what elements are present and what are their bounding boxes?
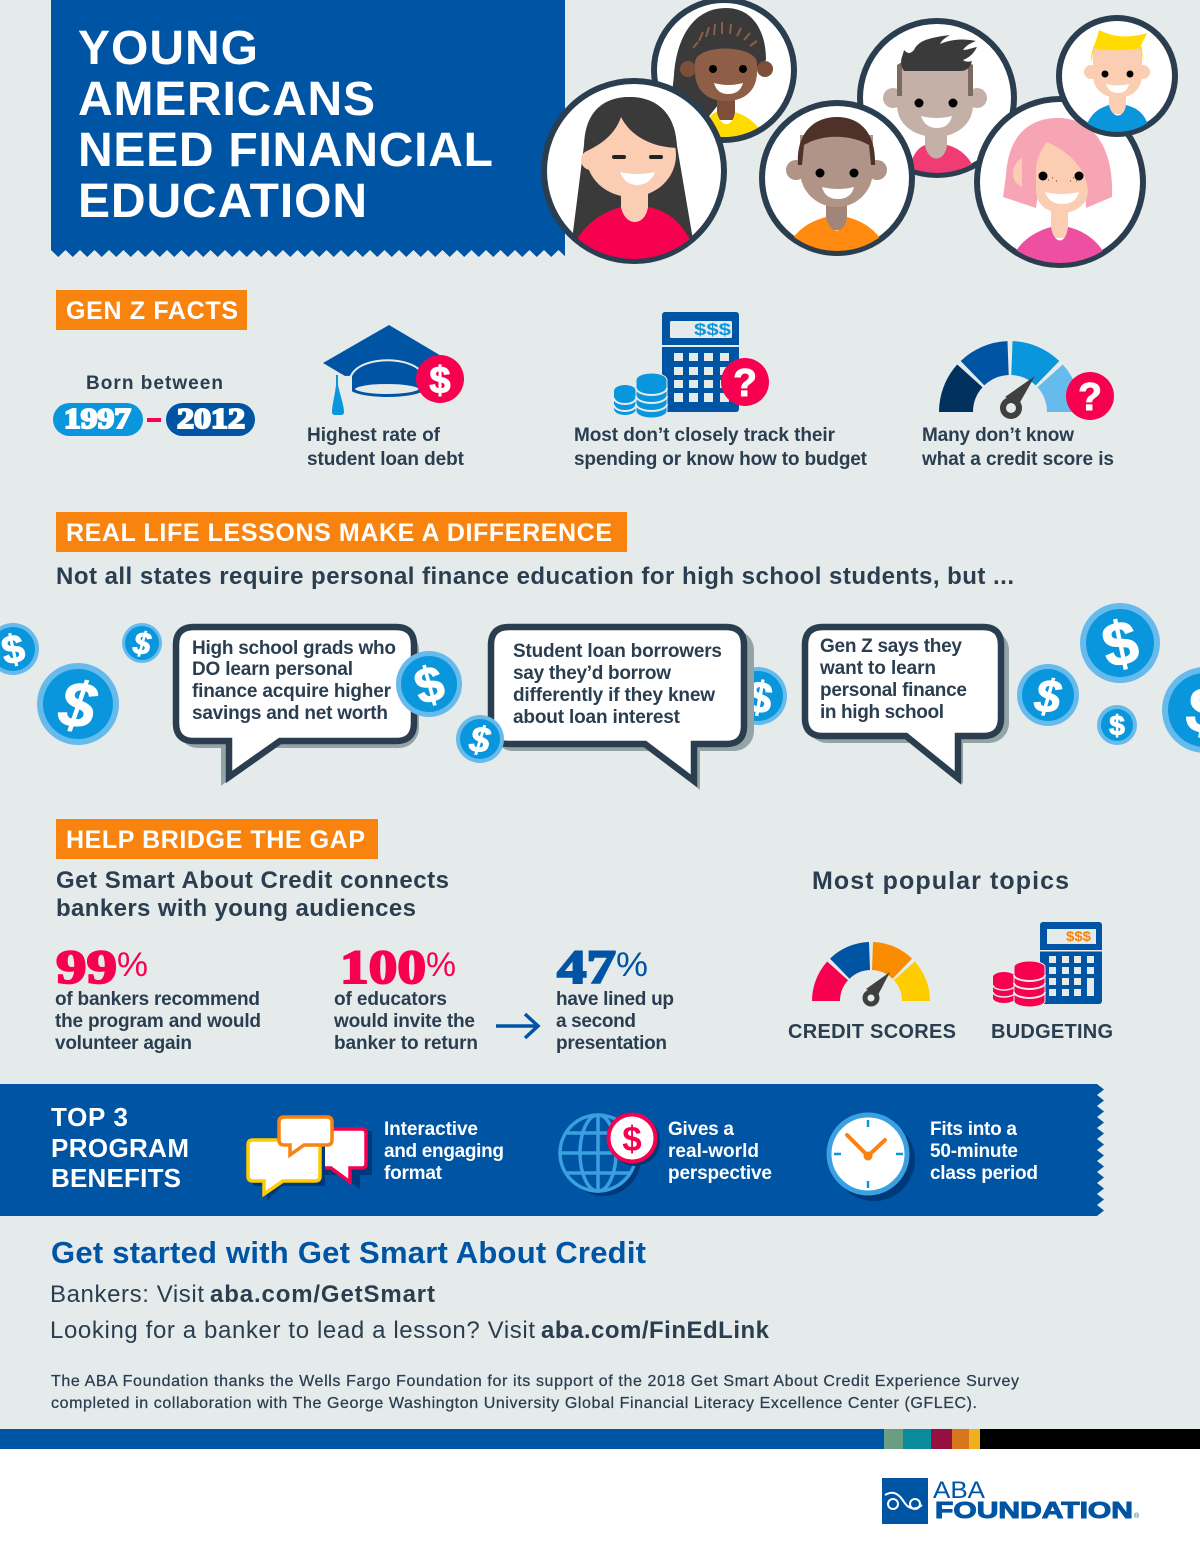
text block: get started: Bankers: Visit	[50, 1281, 204, 1308]
callout: loan borrowers	[491, 627, 754, 790]
portrait group	[544, 0, 1175, 275]
heading: most popular topics: Most popular topics	[812, 867, 1069, 895]
heading: gen z facts	[56, 290, 247, 330]
stat: 47 percent: 47	[557, 941, 616, 994]
icon: graduation cap	[323, 325, 464, 415]
portrait: boy in orange shirt	[762, 103, 912, 255]
icon: globe with dollar: $	[622, 1120, 642, 1159]
topic: budgeting: BUDGETING	[991, 1021, 1113, 1043]
title banner	[51, 0, 565, 257]
heading: help bridge the gap	[56, 819, 378, 859]
portrait: boy with spiked hair	[860, 21, 1014, 180]
stat: 100 percent: banker to return	[334, 1033, 478, 1054]
fact: born between	[53, 373, 255, 436]
logo: ABA Foundation: FOUNDATION	[935, 1497, 1133, 1523]
panel: top 3 program benefits	[0, 1084, 1104, 1216]
footer color bar	[0, 1429, 1200, 1553]
heading: gen z facts: GEN Z FACTS	[66, 297, 238, 325]
coins: mid and right group: $	[409, 654, 450, 716]
callout: high school grads: finance acquire higher	[192, 681, 392, 702]
heading: top 3: BENEFITS	[51, 1163, 181, 1193]
callout: gen z wants to learn: Gen Z says they	[820, 636, 962, 657]
stat: 99 percent	[55, 941, 261, 1054]
topic: credit scores	[788, 942, 956, 1043]
benefit: class period	[930, 1119, 1038, 1184]
topic: credit scores: CREDIT SCORES	[788, 1021, 956, 1043]
logo: ABA Foundation: ABA	[933, 1477, 985, 1504]
text block: footnote: completed in collaboration with The George Washington University Global Financial Literacy Excellence Center (GFLEC).	[51, 1395, 977, 1412]
heading: help bridge the gap: HELP BRIDGE THE GAP	[66, 826, 365, 854]
logo: ABA Foundation	[882, 1477, 1140, 1524]
title banner: AMERICANS	[78, 73, 375, 126]
callout: high school grads: savings and net worth	[192, 703, 388, 724]
benefit: interactive	[384, 1119, 504, 1184]
text block: get started: aba.com/GetSmart	[210, 1281, 435, 1308]
heading: top 3: TOP 3	[51, 1102, 128, 1132]
callout: loan borrowers: say they’d borrow	[513, 663, 671, 684]
callout: loan borrowers: about loan interest	[513, 707, 681, 728]
stat: 47 percent: %	[616, 946, 648, 984]
callout: gen z wants to learn: want to learn	[819, 658, 936, 679]
icon: colored gauge	[812, 942, 930, 1006]
fact: budgeting: spending or know how to budget	[574, 449, 868, 470]
benefit: real-world: real-world	[668, 1141, 759, 1162]
benefit: class period: Fits into a	[930, 1119, 1017, 1140]
stat: 100 percent	[333, 941, 478, 1054]
icon: calculator with coins	[614, 312, 769, 418]
icon: calculator with coins: ?	[733, 362, 757, 405]
heading: real life lessons	[56, 512, 627, 552]
text block: get started: Looking for a banker to lead a lesson? Visit	[50, 1317, 535, 1344]
coin: behind second bubble	[729, 667, 787, 725]
benefit: class period: class period	[930, 1163, 1038, 1184]
coins: mid and right group: $	[1109, 710, 1125, 741]
stat: 99 percent: the program and would	[55, 1011, 261, 1032]
topic: budgeting	[991, 922, 1113, 1043]
fact: budgeting	[574, 312, 868, 470]
icon: clock	[829, 1115, 915, 1201]
benefit: interactive: Interactive	[384, 1119, 478, 1140]
text block: get smart connects: Get Smart About Credit connects	[56, 867, 449, 894]
callout: loan borrowers: differently if they knew	[513, 685, 715, 706]
coin: behind second bubble: $	[743, 672, 776, 724]
callout: gen z wants to learn: personal finance	[820, 680, 967, 701]
text block: get smart connects: bankers with young audiences	[56, 895, 416, 922]
fact: born between: 2012	[177, 404, 245, 435]
stat: 100 percent: 100	[340, 941, 426, 994]
icon: calculator with pink coins: $$$	[1066, 928, 1091, 944]
coins: left group	[0, 623, 162, 745]
portrait: blond boy	[1059, 18, 1175, 134]
benefit: interactive: and engaging	[384, 1141, 504, 1162]
coins: left group: $	[131, 625, 153, 662]
callout: gen z wants to learn	[805, 627, 1009, 784]
heading: top 3	[51, 1102, 189, 1193]
stat: 100 percent: would invite the	[333, 1011, 475, 1032]
title banner: YOUNG	[78, 22, 258, 75]
portrait: girl with pink hair	[977, 99, 1143, 275]
stat: 47 percent: presentation	[556, 1033, 667, 1054]
stat: 47 percent	[556, 941, 674, 1054]
subheading: states: Not all states require personal finance education for high school students, but ...	[56, 563, 1014, 590]
fact: credit score: what a credit score is	[921, 449, 1114, 470]
heading: real life lessons: REAL LIFE LESSONS MAKE A DIFFERENCE	[66, 519, 612, 547]
benefit: real-world: perspective	[668, 1163, 772, 1184]
benefit: real-world	[668, 1119, 772, 1184]
fact: student loan debt	[307, 325, 465, 470]
text block: get started	[50, 1235, 770, 1344]
stat: 100 percent: %	[426, 946, 456, 984]
text block: get started: Get started with Get Smart About Credit	[51, 1235, 646, 1270]
fact: born between: 1997	[64, 404, 131, 435]
icon: gauge with question mark	[939, 341, 1114, 420]
heading: top 3: PROGRAM	[51, 1133, 189, 1163]
benefit: class period: 50-minute	[930, 1141, 1018, 1162]
coins: mid and right group	[396, 603, 1200, 763]
stat: 47 percent: have lined up	[556, 989, 674, 1010]
stat: 99 percent: 99	[56, 941, 117, 994]
icon: globe with dollar	[560, 1114, 660, 1196]
coins: mid and right group: $	[1096, 607, 1144, 682]
portrait: girl with long black hair	[544, 81, 724, 270]
callout: high school grads: High school grads who	[192, 638, 396, 659]
logo: ABA Foundation: ®	[1134, 1512, 1140, 1520]
fact: credit score	[921, 341, 1114, 470]
arrow	[496, 1014, 538, 1038]
text block: get started: aba.com/FinEdLink	[541, 1317, 770, 1344]
callout: loan borrowers: Student loan borrowers	[513, 641, 722, 662]
text block: footnote: The ABA Foundation thanks the Wells Fargo Foundation for its support of the 2018 Get Smart About Credit Experience Survey	[51, 1373, 1019, 1390]
benefit: real-world: Gives a	[668, 1119, 734, 1140]
stat: 100 percent: of educators	[334, 989, 447, 1010]
callout: high school grads	[176, 627, 419, 786]
coins: left group: $	[54, 667, 102, 743]
title banner: NEED FINANCIAL	[78, 124, 493, 177]
text block: footnote	[51, 1373, 1019, 1412]
icon: gauge with question mark: ?	[1078, 376, 1102, 419]
portrait: girl with braids	[654, 0, 794, 150]
icon: calculator with coins: $$$	[694, 320, 732, 339]
fact: student loan debt: Highest rate of	[307, 425, 441, 446]
stat: 99 percent: of bankers recommend	[55, 989, 260, 1010]
coins: mid and right group: $	[1032, 669, 1063, 723]
icon: chat bubbles	[248, 1117, 372, 1201]
benefit: interactive: format	[384, 1163, 443, 1184]
fact: credit score: Many don’t know	[922, 425, 1074, 446]
stat: 99 percent: %	[117, 946, 148, 984]
callout: gen z wants to learn: in high school	[820, 702, 944, 723]
stat: 47 percent: a second	[556, 1011, 636, 1032]
text block: get smart connects	[56, 867, 449, 922]
title banner: EDUCATION	[78, 175, 367, 228]
fact: budgeting: Most don’t closely track their	[574, 425, 836, 446]
callout: high school grads: DO learn personal	[192, 659, 353, 680]
icon: graduation cap: $	[429, 360, 451, 402]
coins: mid and right group: $	[467, 718, 493, 761]
fact: student loan debt: student loan debt	[307, 449, 465, 470]
fact: born between: Born between	[86, 373, 223, 394]
stat: 99 percent: volunteer again	[55, 1033, 192, 1054]
